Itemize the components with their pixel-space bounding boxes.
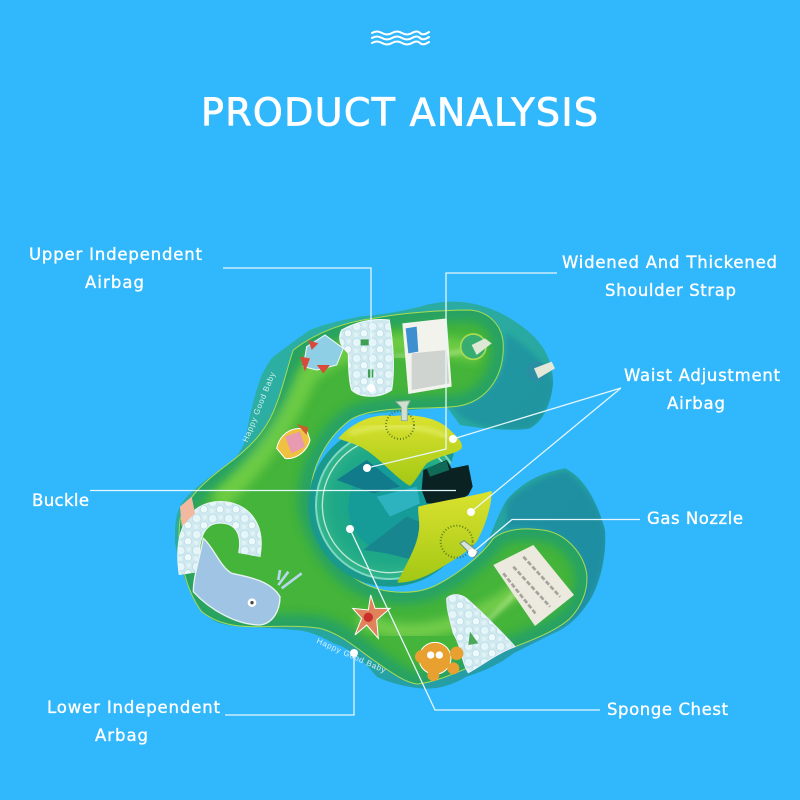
label sticker: lower bbox=[493, 545, 574, 626]
float outer body bbox=[175, 302, 605, 689]
product: baby swim float: Happy Good Baby bbox=[315, 636, 388, 675]
printed text on float: Happy Good Baby bbox=[241, 370, 277, 443]
label: waist adjustment airbag: Airbag bbox=[667, 394, 725, 413]
lower yellow airbag bbox=[397, 491, 492, 583]
label: widened shoulder strap bbox=[562, 253, 777, 300]
bubble letter A bbox=[447, 595, 515, 673]
label: lower independent airbag: Lower Independent bbox=[47, 698, 221, 717]
label: sponge chest: Sponge Chest bbox=[607, 700, 729, 719]
label: lower independent airbag: Arbag bbox=[95, 726, 148, 745]
label: gas nozzle: Gas Nozzle bbox=[647, 509, 743, 528]
product: baby swim float bbox=[175, 302, 607, 689]
nozzle on top arm bbox=[461, 334, 555, 382]
label: upper independent airbag: Upper Independent bbox=[29, 245, 203, 264]
green top and main panel bbox=[179, 310, 587, 684]
label sticker: upper bbox=[402, 318, 452, 394]
whale and bubbles bbox=[180, 497, 302, 625]
darker blue end of arms bbox=[453, 333, 607, 623]
title: PRODUCT ANALYSIS bbox=[201, 90, 598, 134]
icon: waves bbox=[372, 32, 429, 44]
label: upper independent airbag bbox=[29, 245, 203, 292]
label: widened shoulder strap: Widened And Thickened bbox=[562, 253, 777, 272]
upper yellow airbag bbox=[338, 401, 462, 486]
label: lower independent airbag bbox=[47, 698, 221, 745]
bubble letter: upper bbox=[300, 320, 393, 396]
buckle bbox=[422, 460, 473, 503]
label: upper independent airbag: Airbag bbox=[85, 273, 144, 292]
label: widened shoulder strap: Shoulder Strap bbox=[605, 281, 736, 300]
label: waist adjustment airbag bbox=[624, 366, 781, 413]
seat opening bbox=[308, 423, 472, 587]
fish bbox=[277, 424, 310, 459]
label: buckle: Buckle bbox=[32, 491, 89, 510]
orange crab bbox=[415, 642, 463, 681]
starfish bbox=[353, 595, 390, 638]
gap between the arms bbox=[447, 429, 536, 538]
leader lines and dots bbox=[90, 268, 640, 715]
label: waist adjustment airbag: Waist Adjustment bbox=[624, 366, 781, 385]
